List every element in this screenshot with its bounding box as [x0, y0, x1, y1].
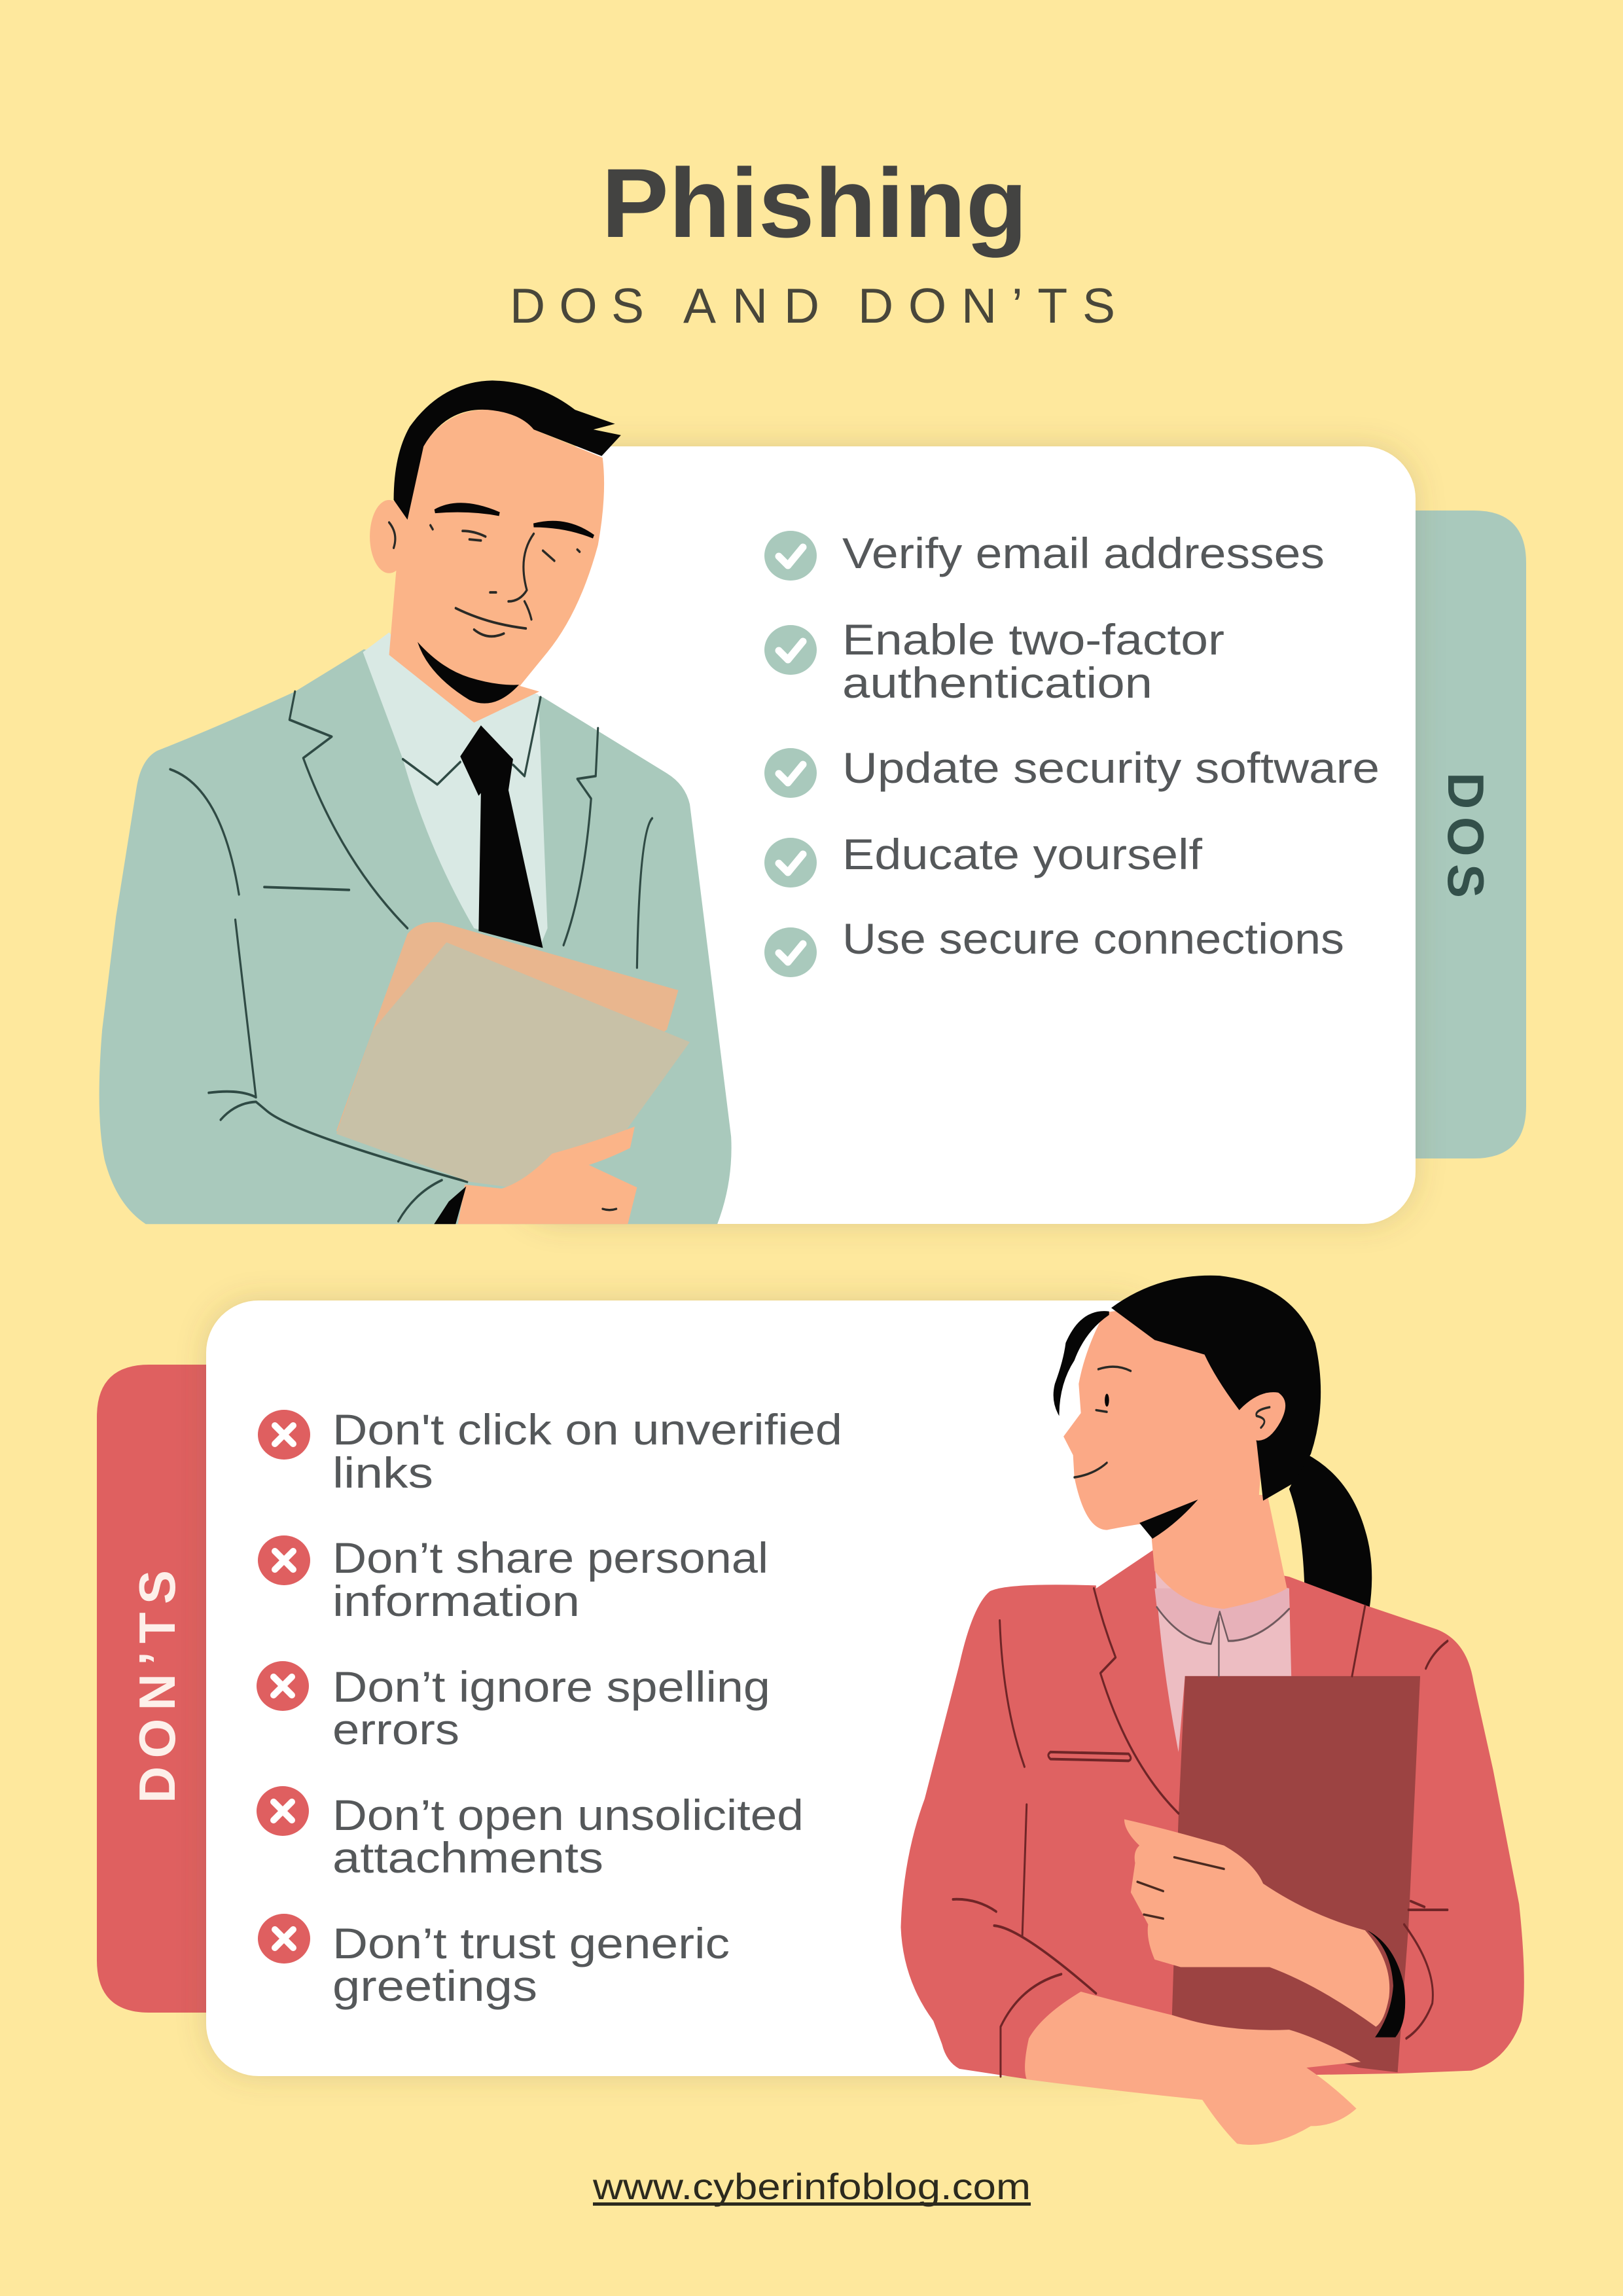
- don'ts item 4: attachments: [332, 1833, 603, 1882]
- don'ts item 2: information: [332, 1577, 580, 1625]
- dos item 4: Educate yourself: [842, 830, 1203, 878]
- label: dos: DOS: [1437, 772, 1495, 898]
- panel: don'ts tab: [97, 1365, 229, 2013]
- dos item 5: Use secure connections: [842, 914, 1344, 963]
- dos item 4: [764, 830, 1203, 888]
- dos item 1: Verify email addresses: [842, 529, 1325, 577]
- don'ts item 3: [257, 1661, 770, 1753]
- footer url: www.cyberinfoblog.com: [592, 2166, 1031, 2207]
- don'ts item 1: [258, 1405, 842, 1497]
- subtitle: AND: [683, 278, 819, 333]
- don'ts item 2: Don’t share personal: [332, 1534, 768, 1582]
- dos item 2: Enable two-factor: [842, 615, 1224, 664]
- don'ts item 1: links: [332, 1448, 433, 1497]
- subtitle: [510, 278, 1115, 333]
- don'ts item 3: errors: [332, 1705, 459, 1753]
- dos item 3: Update security software: [842, 744, 1380, 792]
- title: Phishing: [601, 148, 1027, 258]
- don'ts list: [257, 1405, 842, 2010]
- don'ts item 2: [258, 1534, 768, 1625]
- dos item 3: [764, 744, 1380, 798]
- don'ts item 5: [258, 1914, 730, 2010]
- don'ts item 4: [257, 1786, 804, 1882]
- panel: don'ts card: [206, 1300, 1165, 2076]
- panel: dos card: [510, 446, 1416, 1224]
- dos item 5: [764, 914, 1344, 977]
- panel: dos tab: [1394, 511, 1526, 1158]
- don'ts item 1: Don't click on unverified: [332, 1405, 842, 1454]
- illustration: woman in red jacket: [901, 1276, 1524, 2145]
- label: don'ts: DON’TS: [128, 1570, 186, 1803]
- subtitle: DOS: [510, 278, 644, 333]
- dos item 2: authentication: [842, 658, 1152, 707]
- don'ts item 5: greetings: [332, 1962, 537, 2010]
- don'ts item 5: Don’t trust generic: [332, 1919, 730, 1967]
- dos item 2: [764, 615, 1224, 707]
- subtitle: DON’TS: [858, 278, 1115, 333]
- illustration: man in suit: [99, 380, 732, 1224]
- dos list: [764, 529, 1380, 977]
- don'ts item 4: Don’t open unsolicited: [332, 1791, 804, 1839]
- don'ts item 3: Don’t ignore spelling: [332, 1662, 770, 1711]
